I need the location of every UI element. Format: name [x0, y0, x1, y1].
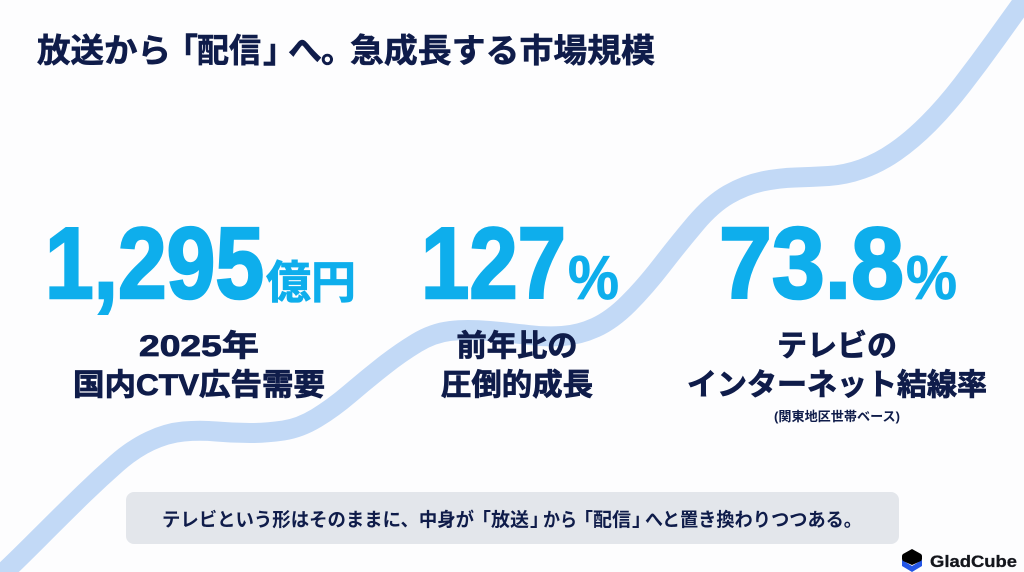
title: 放送から [37, 32, 171, 69]
logo: GladCube [902, 549, 1017, 572]
label: 2025 domestic CTV ad demand [73, 330, 325, 402]
title: 」 [263, 32, 296, 69]
title: 「 [165, 32, 198, 69]
title: 配信 [197, 32, 261, 69]
callout: へと [645, 510, 680, 531]
value: 73.8 percent: % [906, 244, 957, 313]
label: TV internet connection rate: テレビの [777, 330, 897, 363]
value: 73.8 percent: 73.8 [719, 208, 904, 320]
callout: 「 [472, 509, 491, 531]
stat: CTV ad demand [45, 208, 356, 402]
callout: 配信 [593, 509, 631, 531]
callout: テレビという形はそのままに、中身が [162, 508, 474, 531]
callout: 放送 [491, 509, 529, 531]
value: 1,295 oku yen: 1,295 [45, 208, 264, 320]
callout: 」 [530, 510, 549, 531]
title: へ [288, 32, 322, 69]
value: 127 percent: % [568, 244, 619, 313]
title [37, 32, 655, 69]
callout: から [543, 510, 577, 531]
stat: year on year growth [421, 208, 619, 402]
label: 2025 domestic CTV ad demand: 2025年 [139, 330, 259, 363]
label: overwhelming growth: 前年比の [456, 330, 578, 363]
label: overwhelming growth: 圧倒的成長 [441, 369, 593, 402]
value: 127 percent: 127 [421, 208, 566, 320]
callout [126, 492, 899, 544]
label: 2025 domestic CTV ad demand: 国内CTV広告需要 [73, 369, 325, 402]
label: TV internet connection rate [687, 330, 987, 402]
callout: 「 [574, 509, 593, 531]
value: 1,295 oku yen: 億円 [266, 257, 356, 308]
title: 。 [321, 32, 354, 69]
stat: TV internet connection rate [687, 208, 987, 424]
callout: 置き換わりつつある。 [680, 508, 862, 531]
note: Kanto household basis: (関東地区世帯ベース) [774, 409, 900, 424]
logo: GladCube: GladCube [930, 552, 1017, 571]
title: 急成長する市場規模 [350, 32, 655, 69]
label: overwhelming growth [441, 330, 593, 402]
icon: cube [902, 549, 922, 572]
callout: 」 [632, 510, 651, 531]
label: TV internet connection rate: インターネット結線率 [687, 369, 987, 402]
